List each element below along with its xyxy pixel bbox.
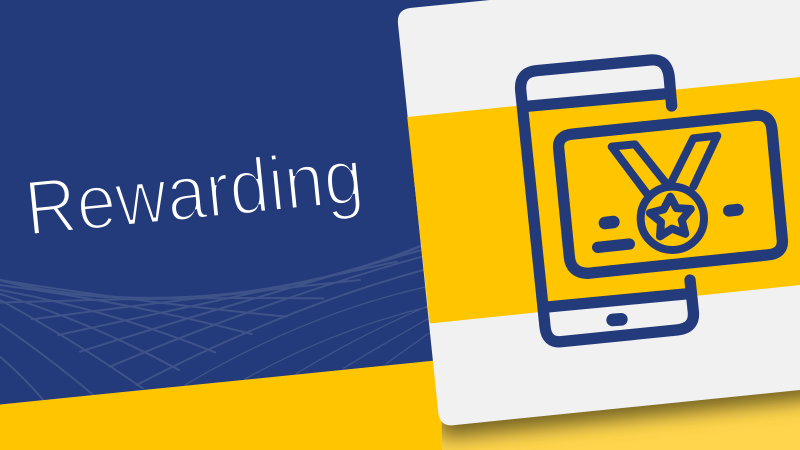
phone home button xyxy=(613,300,621,339)
medal star xyxy=(650,197,691,236)
phone body xyxy=(521,60,693,342)
reward card outline xyxy=(559,115,782,273)
medal disc xyxy=(641,187,704,250)
white card panel xyxy=(398,0,800,425)
dash right xyxy=(729,192,738,229)
icon: phone with medal card xyxy=(521,60,782,342)
perspective grid decoration xyxy=(0,245,433,400)
dash left xyxy=(605,203,613,242)
title: Rewarding: Rewarding xyxy=(21,131,367,252)
yellow bottom strip xyxy=(0,358,460,450)
phone top divider xyxy=(523,93,670,107)
light yellow area under card xyxy=(441,340,800,450)
card shadow xyxy=(442,390,800,450)
dash long xyxy=(598,244,629,247)
medal ribbon right xyxy=(672,136,717,187)
phone bottom divider xyxy=(543,293,692,307)
medal ribbon left xyxy=(612,144,667,193)
yellow card band xyxy=(407,77,800,324)
